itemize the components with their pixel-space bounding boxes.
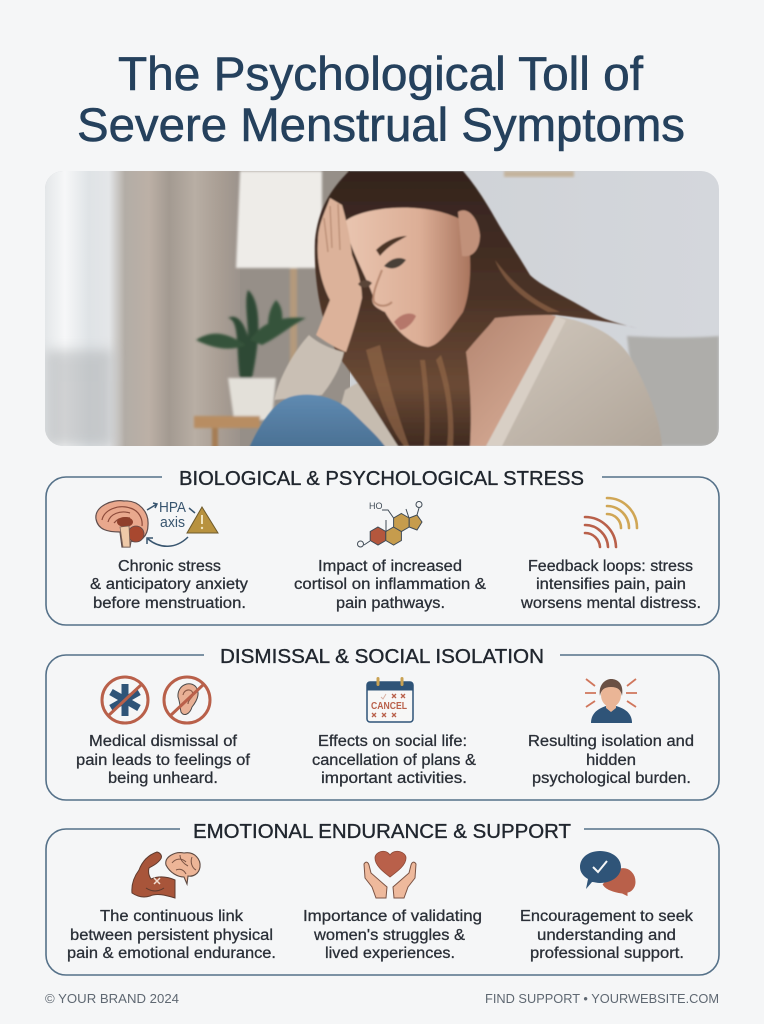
text: chronic stress: Chronic stress — [118, 558, 221, 575]
text: encouragement: understanding and — [537, 927, 676, 944]
text: medical dismissal — [76, 733, 251, 787]
icon: brain with HPA axis and warning — [96, 500, 218, 547]
panel: emotional endurance and support — [46, 821, 719, 975]
text: impact of cortisol: cortisol on inflammation & — [294, 576, 487, 593]
sleeve — [274, 335, 344, 400]
text: continuous link: The continuous link — [100, 908, 243, 925]
icon: cortisol molecule — [358, 501, 422, 547]
knee in jeans — [249, 395, 386, 448]
panel: dismissal and social isolation — [46, 646, 719, 800]
icon: cortisol molecule: HO — [369, 501, 382, 511]
icon: flexed arm and brain — [132, 852, 200, 898]
text: impact of cortisol: Impact of increased — [318, 558, 462, 575]
text: medical dismissal: pain leads to feelings of — [76, 752, 251, 769]
icon: calendar with cancel: CANCEL — [371, 700, 407, 712]
text: continuous link: pain & emotional endurance. — [67, 945, 276, 962]
text: feedback loops: Feedback loops: stress — [528, 558, 693, 575]
text: medical dismissal: Medical dismissal of — [89, 733, 238, 750]
footer: website: FIND SUPPORT • YOURWEBSITE.COM — [485, 991, 719, 1006]
title: The Psychological Toll of — [118, 47, 644, 100]
icon: brain with HPA axis and warning: HPA — [159, 500, 186, 516]
neck and chest — [466, 314, 556, 446]
text: resulting isolation: psychological burden. — [532, 770, 691, 787]
text: feedback loops: worsens mental distress. — [520, 595, 701, 612]
text: continuous link — [67, 908, 276, 962]
footer: brand: © YOUR BRAND 2024 — [45, 991, 179, 1006]
text: validating struggles: Importance of validating — [303, 908, 482, 925]
far eye — [358, 280, 372, 288]
hand on forehead — [316, 198, 362, 352]
text: chronic stress: & anticipatory anxiety — [90, 576, 248, 593]
plant and side table — [194, 290, 306, 448]
eyebrow and eye — [376, 236, 407, 256]
text: effects on social life: Effects on social life: — [318, 733, 467, 750]
nose and lips — [373, 270, 392, 306]
sweater — [486, 316, 662, 446]
hair — [315, 171, 636, 446]
text: chronic stress: before menstruation. — [93, 595, 246, 612]
text: feedback loops — [520, 558, 701, 612]
icon: speech bubbles with check — [580, 851, 636, 897]
photo: distressed woman holding her head on a sofa — [45, 171, 719, 448]
heading: emotional endurance and support: EMOTIONAL ENDURANCE & SUPPORT — [193, 821, 571, 843]
icon: calendar with cancel — [367, 677, 413, 722]
text: impact of cortisol — [294, 558, 487, 612]
icon: hands holding a heart — [364, 851, 416, 898]
heading: biological and psychological stress: BIOLOGICAL & PSYCHOLOGICAL STRESS — [179, 468, 584, 490]
lamp — [236, 171, 322, 378]
title: Severe Menstrual Symptoms — [77, 98, 685, 151]
ear — [458, 210, 480, 256]
text: resulting isolation — [528, 733, 694, 787]
text: effects on social life: important activities. — [321, 770, 467, 787]
text: chronic stress — [90, 558, 248, 612]
text: impact of cortisol: pain pathways. — [336, 595, 445, 612]
icon: isolated person — [585, 679, 637, 723]
text: medical dismissal: being unheard. — [108, 770, 218, 787]
icon: crossed-out medical symbol — [102, 677, 148, 723]
text: resulting isolation: Resulting isolation and — [528, 733, 694, 750]
face — [344, 208, 470, 347]
icon: crossed-out ear — [164, 677, 210, 723]
text: encouragement: Encouragement to seek — [520, 908, 693, 925]
woman — [249, 171, 662, 448]
text: effects on social life — [312, 733, 477, 787]
text: validating struggles — [303, 908, 482, 962]
text: feedback loops: intensifies pain, pain — [536, 576, 686, 593]
text: encouragement — [520, 908, 693, 962]
wall picture — [504, 171, 574, 177]
title — [77, 47, 685, 151]
text: validating struggles: women's struggles & — [313, 927, 466, 944]
icon: feedback waves — [585, 498, 637, 547]
text: resulting isolation: hidden — [586, 752, 636, 769]
text: encouragement: professional support. — [530, 945, 684, 962]
sofa — [627, 336, 719, 446]
text: continuous link: between persistent physical — [70, 927, 273, 944]
panel: biological and psychological stress — [46, 468, 719, 625]
text: validating struggles: lived experiences. — [325, 945, 455, 962]
icon: brain with HPA axis and warning: axis — [160, 515, 185, 531]
text: effects on social life: cancellation of plans & — [312, 752, 477, 769]
heading: dismissal and social isolation: DISMISSAL & SOCIAL ISOLATION — [220, 646, 544, 668]
